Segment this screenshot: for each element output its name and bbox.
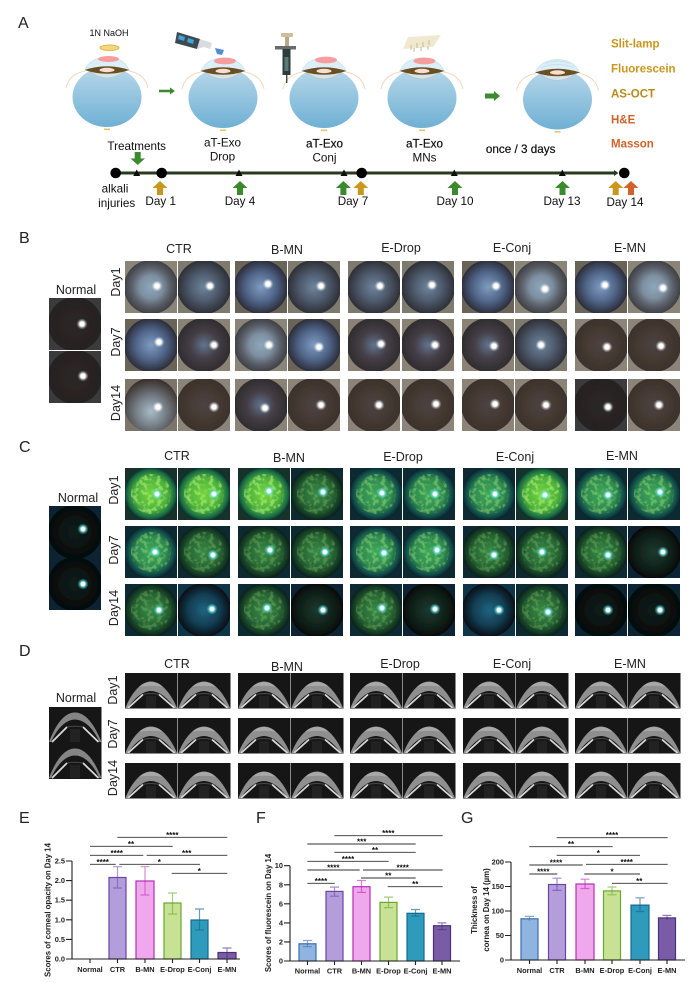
headers B: E-Conj <box>493 241 531 255</box>
normal eyes B <box>48 297 102 404</box>
significance brackets F: **** <box>382 829 395 838</box>
panel letter E: E <box>19 810 30 827</box>
axes F: E-Conj <box>404 966 427 976</box>
headers B: E-Drop <box>381 241 421 255</box>
axes G: E-Conj <box>628 966 652 975</box>
panel letter B: B <box>19 230 30 247</box>
axes G: B-MN <box>575 966 595 975</box>
significance brackets G: **** <box>606 831 619 840</box>
axes E: 0.5 <box>55 935 65 944</box>
headers B: Normal <box>56 283 96 297</box>
significance brackets F <box>307 829 443 889</box>
headers B <box>56 241 646 297</box>
axes F: B-MN <box>352 966 371 976</box>
axes E: 2.0 <box>55 876 65 885</box>
panel C: fluorescein images <box>19 439 681 637</box>
panel letter D: D <box>19 643 31 660</box>
labels: treatments: aT-Exo <box>306 138 344 150</box>
axes F: 0 <box>279 956 283 966</box>
axes G: E-Drop <box>600 966 625 975</box>
labels: treatments: aT-Exo <box>204 137 242 150</box>
y axis title E: Scores of corneal opacity on Day 14 <box>44 842 52 977</box>
label: 1N NaOH: 1N NaOH <box>89 28 129 38</box>
axes F: Normal <box>295 966 320 976</box>
labels: treatments: once / 3 days <box>486 143 556 156</box>
labels: timeline days: Day 13 <box>543 195 581 208</box>
labels: treatments: Conj <box>312 152 337 164</box>
E-MN images B <box>574 260 681 432</box>
panel B: slit-lamp images <box>19 230 681 432</box>
axes E <box>55 856 240 974</box>
E-Drop images B <box>347 260 455 432</box>
B-MN scans D <box>238 673 344 799</box>
significance brackets E: * <box>158 858 162 867</box>
axes F: E-Drop <box>376 966 401 976</box>
labels: treatments: Drop <box>210 151 236 164</box>
axes G <box>492 858 685 975</box>
significance brackets F: **** <box>315 877 328 886</box>
axes E: 1.0 <box>55 915 65 924</box>
day labels B <box>109 267 123 421</box>
day labels B: Day1 <box>109 267 123 297</box>
labels: timeline days: Day 1 <box>145 195 176 208</box>
axes E: 0.0 <box>55 954 65 964</box>
significance brackets F: *** <box>357 838 367 846</box>
axes F: 2 <box>279 937 283 946</box>
headers D <box>56 657 646 705</box>
significance brackets F: **** <box>342 855 355 864</box>
significance brackets E: **** <box>110 849 124 858</box>
axes F: 8 <box>279 880 283 889</box>
headers D: E-MN <box>614 657 646 671</box>
axes F: 6 <box>279 899 283 908</box>
axes G: 100 <box>492 906 504 916</box>
labels: readout legend: Masson <box>611 139 654 151</box>
labels: timeline days: alkali <box>102 183 128 196</box>
icon: eye drop bottle <box>175 32 224 55</box>
CTR images C <box>124 467 231 637</box>
axes F: E-MN <box>433 966 451 976</box>
day labels C: Day14 <box>107 590 121 626</box>
axes G: 150 <box>492 882 504 891</box>
panel A: treatment schematic and timeline <box>18 15 676 210</box>
B-MN images B <box>234 260 341 432</box>
arrow: green step 1 <box>159 88 175 94</box>
significance brackets G: * <box>597 849 601 858</box>
panel D: AS-OCT images <box>19 643 680 799</box>
panel E: corneal opacity bar chart <box>19 810 240 977</box>
significance brackets F: ** <box>385 872 392 880</box>
headers D: E-Drop <box>380 657 420 671</box>
B-MN images C <box>237 467 344 637</box>
y axis title G: cornea on Day 14 (µm) <box>482 868 491 952</box>
panel letter C: C <box>19 439 31 456</box>
headers D: E-Conj <box>493 657 531 671</box>
axes F: 10 <box>275 861 283 870</box>
day labels D <box>106 675 120 796</box>
E-Conj images C <box>462 467 569 637</box>
labels: timeline days: Day 14 <box>606 196 644 209</box>
day labels C: Day7 <box>107 535 121 565</box>
arrows: readout days <box>152 181 638 195</box>
significance brackets G: **** <box>620 858 634 867</box>
axes F: 4 <box>279 918 284 927</box>
day labels B: Day7 <box>109 327 123 357</box>
labels: timeline days: Day 4 <box>225 195 256 208</box>
bars E <box>109 867 236 959</box>
headers B: CTR <box>166 242 192 256</box>
labels: treatments <box>107 137 556 164</box>
axes E: 2.5 <box>55 856 65 866</box>
headers C: E-Conj <box>496 450 534 464</box>
timeline <box>110 168 630 178</box>
icon: gold NaOH disc <box>100 45 119 50</box>
headers C: B-MN <box>273 451 305 465</box>
significance brackets G: ** <box>568 840 575 849</box>
axes E: E-MN <box>218 965 236 974</box>
labels: readout legend: Slit-lamp <box>611 39 660 51</box>
significance brackets F: ** <box>372 846 379 855</box>
labels: treatments: aT-Exo <box>406 138 444 150</box>
panel letter A: A <box>18 15 29 32</box>
labels: readout legend: Fluorescein <box>611 64 676 76</box>
significance brackets F: ** <box>412 880 419 889</box>
E-Conj images B <box>461 260 568 432</box>
icon: eye 5 healed <box>516 60 598 133</box>
day labels D: Day7 <box>106 719 120 749</box>
significance brackets E: *** <box>182 849 192 858</box>
E-Drop images C <box>349 467 456 637</box>
labels: timeline days: injuries <box>98 197 135 210</box>
labels: timeline days: Day 10 <box>436 195 474 208</box>
day labels C <box>107 475 121 626</box>
headers C <box>58 449 638 505</box>
bars G <box>521 878 676 960</box>
significance brackets G <box>529 831 668 886</box>
significance brackets E <box>90 831 227 876</box>
headers D: CTR <box>164 657 190 671</box>
axes G: E-MN <box>658 966 676 975</box>
headers D: B-MN <box>271 660 303 674</box>
y axis title G <box>470 868 491 952</box>
labels: readout legend: H&E <box>611 114 636 126</box>
labels: treatments: MNs <box>412 152 437 164</box>
significance brackets F: **** <box>396 864 410 872</box>
day labels D: Day14 <box>106 760 120 796</box>
E-Conj scans D <box>463 673 568 799</box>
labels: readout legend <box>611 39 676 151</box>
CTR scans D <box>125 673 230 799</box>
E-Drop scans D <box>350 673 456 799</box>
axes G: 50 <box>496 931 504 940</box>
icon: microneedle patch <box>403 35 441 52</box>
significance brackets E: **** <box>166 831 179 840</box>
headers C: E-Drop <box>383 450 423 464</box>
headers D: Normal <box>56 691 96 705</box>
significance brackets E: * <box>198 867 202 876</box>
axes G: CTR <box>549 966 565 975</box>
headers C: E-MN <box>606 449 638 463</box>
icon: eye 2 eye drop <box>182 58 264 131</box>
axes G: 0 <box>500 956 504 964</box>
icon: syringe <box>275 33 296 83</box>
axes E: E-Conj <box>188 965 211 974</box>
axes F: CTR <box>327 966 343 976</box>
labels: readout legend: AS-OCT <box>611 88 655 100</box>
icon: eye 1 alkali injury <box>66 56 148 130</box>
bars F <box>299 880 450 961</box>
headers C: Normal <box>58 491 98 505</box>
significance brackets G: ** <box>636 877 643 886</box>
arrow: treatments start <box>130 152 145 165</box>
panel letter G: G <box>461 810 473 827</box>
headers B: E-MN <box>614 241 646 255</box>
labels: timeline days <box>98 183 644 210</box>
day labels D: Day1 <box>106 675 120 705</box>
axes E: B-MN <box>135 965 155 974</box>
significance brackets E: ** <box>128 840 135 849</box>
icon: eye 3 conjunctival injection <box>283 57 365 131</box>
normal eyes C <box>48 505 102 611</box>
E-MN scans D <box>575 673 680 799</box>
normal scans D <box>49 707 102 779</box>
labels: timeline days: Day 7 <box>338 195 368 208</box>
axes E: 1.5 <box>55 896 65 905</box>
axes E: CTR <box>110 965 126 974</box>
y axis title F: Scores of fluorescein on Day 14 <box>264 853 273 972</box>
CTR images B <box>124 260 231 432</box>
significance brackets G: **** <box>550 858 563 868</box>
panel letter F: F <box>256 810 266 827</box>
labels: treatments: Treatments <box>107 140 166 153</box>
headers C: CTR <box>164 449 190 463</box>
significance brackets F: **** <box>327 864 340 872</box>
arrow: green step 2 <box>485 91 500 101</box>
significance brackets G: * <box>610 868 614 876</box>
E-MN images C <box>574 467 681 637</box>
axes E: Normal <box>77 965 103 974</box>
y axis title G: Thickness of <box>470 886 479 934</box>
significance brackets E: **** <box>96 858 110 867</box>
axes G: 200 <box>492 858 504 866</box>
panel G: corneal thickness bar chart <box>461 810 685 975</box>
significance brackets G: **** <box>537 868 550 876</box>
headers B: B-MN <box>271 243 303 257</box>
axes G: Normal <box>517 966 542 975</box>
day labels C: Day1 <box>107 475 121 505</box>
day labels B: Day14 <box>109 385 123 421</box>
panel F: fluorescein score bar chart <box>256 810 460 976</box>
axes F <box>275 861 460 976</box>
icon: eye 4 microneedle <box>381 58 463 131</box>
axes E: E-Drop <box>160 965 185 974</box>
